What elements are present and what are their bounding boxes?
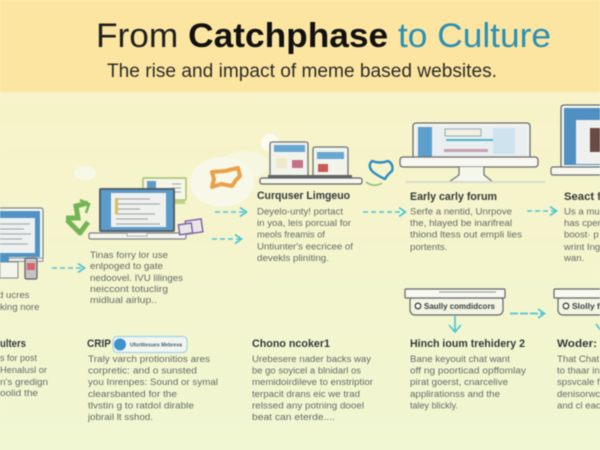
- text: Chono: be go soyicel a blnidarl os: [252, 366, 361, 376]
- icon: green arrows: [66, 200, 89, 233]
- header band: [0, 0, 600, 92]
- text: left monitor caption: [0, 290, 39, 313]
- text: laptop caption: midlual airlup..: [90, 295, 157, 306]
- badge: pill: [113, 336, 187, 352]
- text: Woder: spsvcale f: [557, 377, 600, 388]
- background: [0, 92, 600, 450]
- arrow: forum to right: [527, 210, 556, 212]
- box: Saully comdidcors: Saully comdidcors: [424, 301, 495, 311]
- box: Saully comdidcors: [405, 289, 505, 315]
- arrow: box to box: [510, 312, 544, 314]
- text: right column: [563, 206, 600, 264]
- icon: cloud behind orange shape: [190, 151, 269, 207]
- icon: forum desktop: [400, 123, 545, 183]
- text: Chono: memidoirdileve to enstriptior: [252, 377, 374, 388]
- text: CRIP: jobrail lt sshod.: [87, 412, 153, 423]
- text: Hinch: pirat goerst, cnarcelive: [410, 377, 508, 388]
- text: CRIP: corpretic: and o sunsted: [88, 366, 197, 376]
- icon: blue shape: [370, 161, 392, 179]
- text: forum: the, hlayed be inarifreal: [410, 218, 512, 229]
- text: Woder: and cl eac: [557, 400, 600, 412]
- text: laptop caption: Tinas forry lor use: [90, 250, 168, 261]
- heading: right column: Seact f: [564, 191, 600, 203]
- arrow: down from box: [449, 316, 461, 332]
- text: right column: boost· p: [564, 230, 599, 240]
- text: right column: wan.: [563, 253, 584, 264]
- text: center column: [257, 206, 353, 264]
- text: Hinch: applirationss and the: [410, 389, 500, 400]
- text: CRIP: [87, 354, 218, 423]
- text: CRIP: you Inrenpes: Sound or symal: [88, 377, 218, 388]
- text: laptop caption: enlpoged to gate: [90, 261, 163, 272]
- text: center column: devekls pliniting.: [257, 253, 329, 264]
- icon: purple cards: [178, 219, 203, 235]
- subtitle: The rise and impact of meme based websites.: [107, 61, 497, 82]
- heading: Chono: Chono ncoker1: [252, 338, 330, 350]
- text: ulters: Henalusl or: [0, 365, 48, 376]
- text: forum: portents.: [410, 242, 447, 253]
- text: right column: wrint Ing: [563, 242, 600, 253]
- text: Hinch: taley blickly.: [410, 400, 458, 412]
- text: Hinch: off ng poorticad opffomlay: [410, 366, 526, 376]
- arrow: down right: [596, 324, 600, 332]
- text: left monitor caption: king nore: [0, 302, 39, 313]
- box: Slolly f: Slolly f: [572, 301, 600, 311]
- text: ulters: s for post: [0, 353, 37, 364]
- text: Chono: relssed any potning dooel: [252, 400, 364, 412]
- heading: ulters: ulters: [0, 338, 26, 350]
- arrow: upper dashed: [215, 211, 246, 213]
- icon: back card: [143, 178, 186, 204]
- text: CRIP: clearsbanted for the: [88, 389, 177, 400]
- text: ulters: oolid the: [0, 388, 38, 399]
- text: ulters: n's gredign: [0, 377, 48, 388]
- title: From Catchphase to Culture: [96, 17, 551, 55]
- text: right column: has cper: [564, 218, 600, 229]
- text: Chono: terpacit drans eic we trad: [252, 389, 360, 400]
- heading: center column: Curquser Limgeuo: [257, 190, 351, 202]
- text: Woder: denisorwc: [557, 389, 600, 400]
- icon: left desktop monitor: [0, 208, 43, 279]
- text: laptop caption: [90, 250, 183, 306]
- text: Woder: That Chat: [557, 354, 599, 365]
- box: Slolly f: [554, 289, 600, 315]
- text: CRIP: Traly varch protionitios ares: [88, 354, 210, 365]
- arrow: center to forum: [363, 211, 405, 213]
- text: center column: Deyelo-unty! portact: [257, 206, 343, 218]
- text: Hinch: [410, 354, 526, 412]
- text: center column: in yoa, leis porcual for: [257, 218, 352, 229]
- badge: pill: Uforlitesues Mebreva: [130, 342, 183, 348]
- text: laptop caption: nedoovel. IVU lilinges: [90, 273, 183, 284]
- icon: orange shape: [212, 168, 240, 187]
- icon: twin laptops: [260, 134, 362, 184]
- text: Chono: Urebesere nader backs way: [252, 354, 371, 365]
- text: forum: thiond ltess out empli lies: [410, 230, 522, 240]
- text: center column: meols freamis of: [257, 230, 325, 240]
- heading: Woder: Woder:: [557, 338, 597, 350]
- text: CRIP: tlvstin g to ratdol dirable: [88, 400, 194, 412]
- text: center column: Untiunter's eecricee of: [257, 242, 353, 252]
- text: Hinch: Bane keyouit chat want: [410, 354, 510, 365]
- text: forum: Serfe a nentid, Unrpove: [410, 206, 512, 218]
- arrow: lower dashed: [212, 238, 241, 240]
- text: Woder: to thaar in: [557, 366, 600, 376]
- text: Chono: [252, 354, 374, 423]
- arrow: left monitor to laptop: [52, 267, 84, 269]
- text: Woder: [557, 354, 600, 412]
- icon: central laptop: [89, 188, 186, 239]
- heading: CRIP: CRIP: [87, 338, 111, 350]
- text: forum: [410, 206, 522, 253]
- text: laptop caption: neiccont totuclirg: [90, 284, 168, 295]
- icon: cloud: [74, 166, 96, 180]
- icon: right laptop: [551, 105, 600, 175]
- icon: green squiggle: [366, 182, 382, 185]
- heading: Hinch: Hinch ioum trehidery 2: [410, 338, 525, 350]
- text: ulters: [0, 353, 48, 399]
- text: Chono: beat can eterde....: [252, 412, 335, 423]
- heading: forum: Early carly forum: [410, 191, 497, 203]
